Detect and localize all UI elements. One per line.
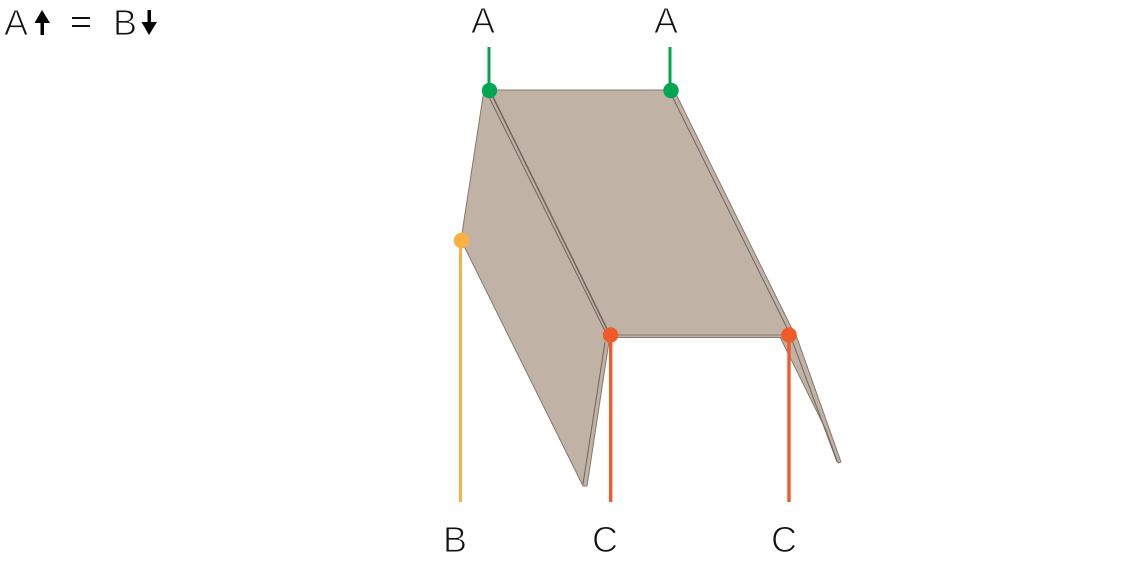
red line and point right bbox=[781, 327, 797, 502]
main top panel bbox=[489, 90, 795, 338]
red line and point left bbox=[603, 327, 618, 502]
label A in equation: A bbox=[4, 2, 28, 43]
green line and point left bbox=[482, 47, 497, 98]
label C right: C bbox=[771, 519, 797, 560]
equation: A up equals B down bbox=[4, 2, 157, 43]
label B: B bbox=[443, 519, 467, 560]
label A right: A bbox=[654, 0, 678, 41]
label A left: A bbox=[471, 0, 495, 41]
label C left: C bbox=[592, 519, 618, 560]
orange line and point bbox=[454, 233, 469, 502]
left panel bbox=[461, 90, 610, 486]
icon: up arrow bbox=[34, 10, 50, 35]
right lower flap bbox=[780, 335, 841, 463]
label B in equation: B bbox=[113, 2, 137, 43]
fold lines bbox=[486, 90, 837, 484]
green line and point right bbox=[663, 47, 679, 98]
folded sheet shape bbox=[461, 90, 841, 486]
equals sign bbox=[72, 17, 90, 27]
icon: down arrow bbox=[142, 10, 157, 35]
